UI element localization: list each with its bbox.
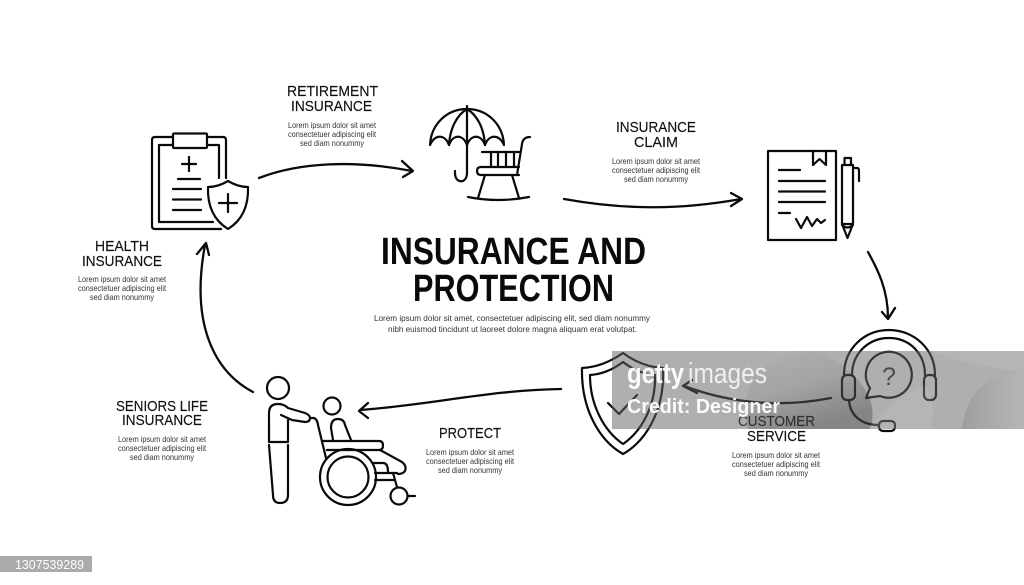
panel: customer service label: CUSTOMER xyxy=(738,414,815,430)
watermark logo text: getty xyxy=(627,358,684,390)
icon: caregiver pushing wheelchair xyxy=(267,377,415,505)
panel: insurance claim label: sed diam nonummy xyxy=(624,174,689,184)
watermark band xyxy=(612,351,1024,429)
panel: protect label xyxy=(426,426,515,475)
title: INSURANCE AND xyxy=(381,231,646,273)
panel: seniors life insurance label: consectetuer adipiscing elit xyxy=(118,443,207,453)
panel: seniors life insurance label: sed diam nonummy xyxy=(130,452,195,462)
icon: umbrella and rocking chair xyxy=(430,106,530,200)
panel: protect label: PROTECT xyxy=(439,426,501,442)
icon: question mark: ? xyxy=(882,363,896,391)
panel: retirement insurance label: consectetuer adipiscing elit xyxy=(288,129,377,139)
panel: retirement insurance label: Lorem ipsum dolor sit amet xyxy=(288,120,377,130)
panel: protect label: consectetuer adipiscing elit xyxy=(426,456,515,466)
intro text xyxy=(374,313,651,334)
arrow: customer service to protect xyxy=(683,380,831,403)
panel: seniors life insurance label xyxy=(116,399,208,462)
panel: protect label: sed diam nonummy xyxy=(438,465,503,475)
panel: health insurance label: consectetuer adipiscing elit xyxy=(78,283,167,293)
panel: protect label: Lorem ipsum dolor sit amet xyxy=(426,447,515,457)
panel: retirement insurance label: sed diam nonummy xyxy=(300,138,365,148)
intro text: Lorem ipsum dolor sit amet, consectetuer adipiscing elit, sed diam nonummy xyxy=(374,313,651,323)
arrow: health to retirement xyxy=(259,161,413,178)
panel: retirement insurance label: INSURANCE xyxy=(291,99,372,115)
icon: signed document and pen xyxy=(768,151,859,240)
panel: retirement insurance label: RETIREMENT xyxy=(287,84,378,100)
panel: insurance claim label: CLAIM xyxy=(634,135,678,151)
panel: retirement insurance label xyxy=(287,84,378,148)
panel: customer service label: SERVICE xyxy=(747,429,806,445)
panel: health insurance label: HEALTH xyxy=(95,239,149,255)
panel: insurance claim label: consectetuer adipiscing elit xyxy=(612,165,701,175)
panel: seniors life insurance label: INSURANCE xyxy=(122,413,202,429)
panel: customer service label: sed diam nonummy xyxy=(744,468,809,478)
panel: insurance claim label: Lorem ipsum dolor sit amet xyxy=(612,156,701,166)
icon: clipboard with medical shield xyxy=(152,134,248,229)
panel: customer service label: Lorem ipsum dolor sit amet xyxy=(732,450,821,460)
panel: health insurance label xyxy=(78,239,167,302)
arrow: claim to customer service xyxy=(868,252,895,319)
panel: health insurance label: INSURANCE xyxy=(82,254,162,270)
panel: customer service label: consectetuer adipiscing elit xyxy=(732,459,821,469)
watermark credit text: Credit: Designer xyxy=(627,396,780,418)
panel: health insurance label: Lorem ipsum dolor sit amet xyxy=(78,274,167,284)
panel: seniors life insurance label: SENIORS LIFE xyxy=(116,399,208,415)
panel: insurance claim label: INSURANCE xyxy=(616,120,696,136)
title xyxy=(381,231,646,310)
icon: headset with question bubble xyxy=(842,330,936,431)
image id tag xyxy=(0,556,92,572)
arrow: seniors to health xyxy=(197,243,253,392)
arrow: protect to seniors xyxy=(359,389,561,418)
intro text: nibh euismod tincidunt ut laoreet dolore magna aliquam erat volutpat. xyxy=(388,324,637,334)
watermark logo text: images xyxy=(688,358,767,390)
panel: health insurance label: sed diam nonummy xyxy=(90,292,155,302)
title: PROTECTION xyxy=(413,268,614,310)
icon: shield with check mark xyxy=(582,353,663,454)
panel: seniors life insurance label: Lorem ipsum dolor sit amet xyxy=(118,434,207,444)
image id tag: 1307539289 xyxy=(15,558,84,572)
watermark logo text xyxy=(627,358,767,390)
panel: customer service label xyxy=(732,414,821,478)
arrow: retirement to claim xyxy=(564,193,742,207)
panel: insurance claim label xyxy=(612,120,701,184)
